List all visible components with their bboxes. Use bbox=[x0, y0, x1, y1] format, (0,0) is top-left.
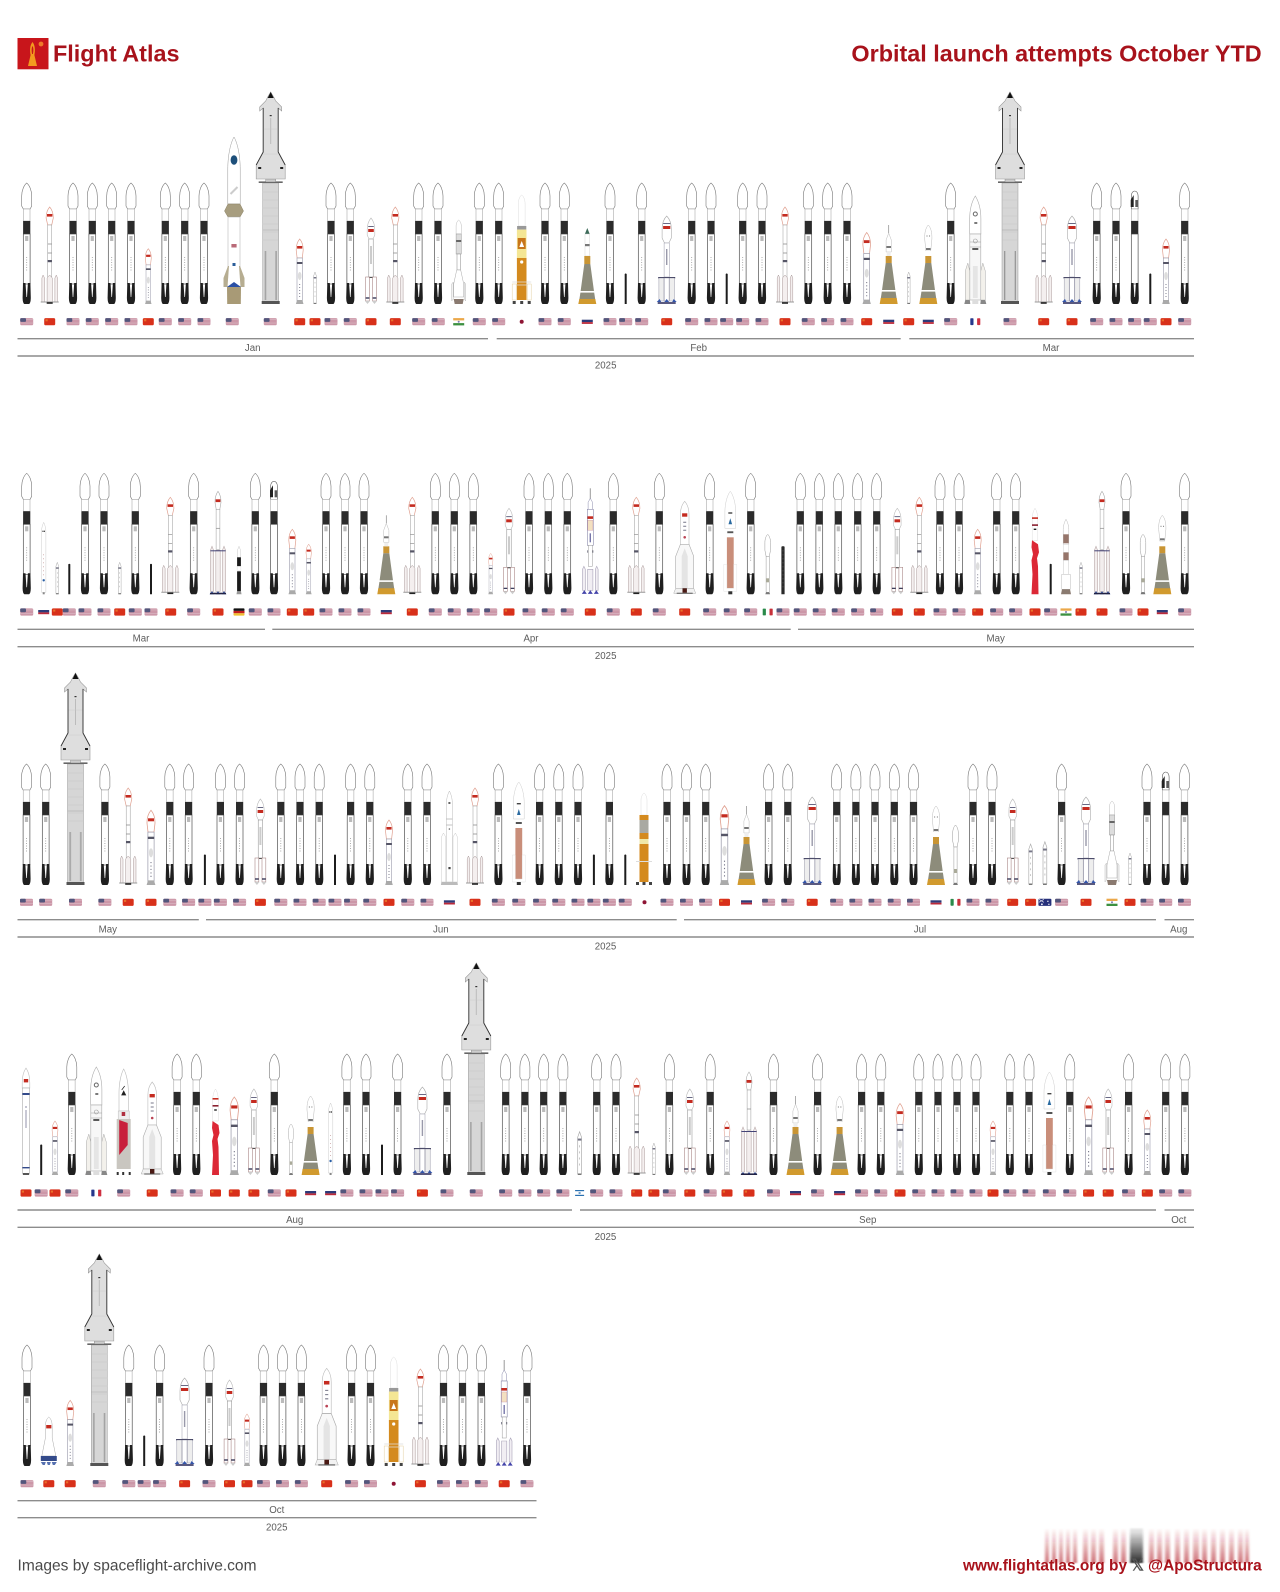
month axis row 4: Aug bbox=[286, 1215, 303, 1226]
country flags row 5 bbox=[20, 1480, 534, 1487]
month axis row 5: Oct bbox=[269, 1505, 285, 1516]
country flags row 3 bbox=[20, 899, 1191, 906]
month axis row 3: Aug bbox=[1170, 924, 1187, 936]
month axis row 2: May bbox=[987, 634, 1005, 644]
month axis row 1: Jan bbox=[245, 343, 261, 354]
year label row 2: 2025 bbox=[595, 651, 616, 662]
panel: row 3, May to August bbox=[18, 673, 1194, 952]
panel: row 4, August to October bbox=[18, 963, 1194, 1243]
month axis row 4: Sep bbox=[859, 1215, 876, 1226]
month axis row 3: Jun bbox=[433, 924, 449, 936]
month axis row 1: Feb bbox=[690, 343, 707, 354]
year label row 1: 2025 bbox=[595, 360, 616, 372]
month axis row 2 bbox=[18, 629, 1194, 647]
month axis row 1: Mar bbox=[1043, 343, 1060, 354]
rockets row 3 bbox=[22, 673, 1190, 885]
rockets row 2 bbox=[22, 473, 1190, 594]
country flags row 1 bbox=[20, 318, 1191, 325]
month axis row 5 bbox=[18, 1501, 536, 1518]
month axis row 2: Apr bbox=[523, 634, 539, 644]
month axis row 3 bbox=[18, 920, 1194, 937]
footer: blurred watermark overlay bbox=[1045, 1528, 1249, 1563]
month axis row 4: Oct bbox=[1171, 1215, 1187, 1226]
country flags row 4 bbox=[20, 1189, 1191, 1197]
panel: row 5, October bbox=[18, 1254, 536, 1534]
month axis row 3: May bbox=[99, 924, 117, 936]
heading: Orbital launch attempts October YTD: Orbital launch attempts October YTD bbox=[851, 40, 1262, 66]
month axis row 4 bbox=[18, 1210, 1194, 1227]
panel: row 2, March to May bbox=[18, 473, 1194, 662]
year label row 5: 2025 bbox=[266, 1522, 288, 1534]
rockets row 1 bbox=[22, 92, 1190, 304]
header: logo icon bbox=[18, 38, 48, 69]
year label row 3: 2025 bbox=[595, 942, 616, 952]
rockets row 4 bbox=[22, 963, 1190, 1175]
heading: Flight Atlas: Flight Atlas bbox=[53, 40, 179, 66]
footer: site and author credit: www.flightatlas.org by 𝕏 @ApoStructura bbox=[962, 1558, 1262, 1574]
month axis row 2: Mar bbox=[133, 634, 150, 644]
footer: image credit: Images by spaceflight-archive.com bbox=[18, 1558, 256, 1574]
month axis row 3: Jul bbox=[914, 924, 926, 936]
panel: row 1, January to March bbox=[18, 92, 1194, 372]
rockets row 5 bbox=[22, 1254, 532, 1466]
month axis row 1 bbox=[18, 339, 1194, 356]
country flags row 2 bbox=[20, 608, 1191, 616]
year label row 4: 2025 bbox=[595, 1232, 616, 1243]
